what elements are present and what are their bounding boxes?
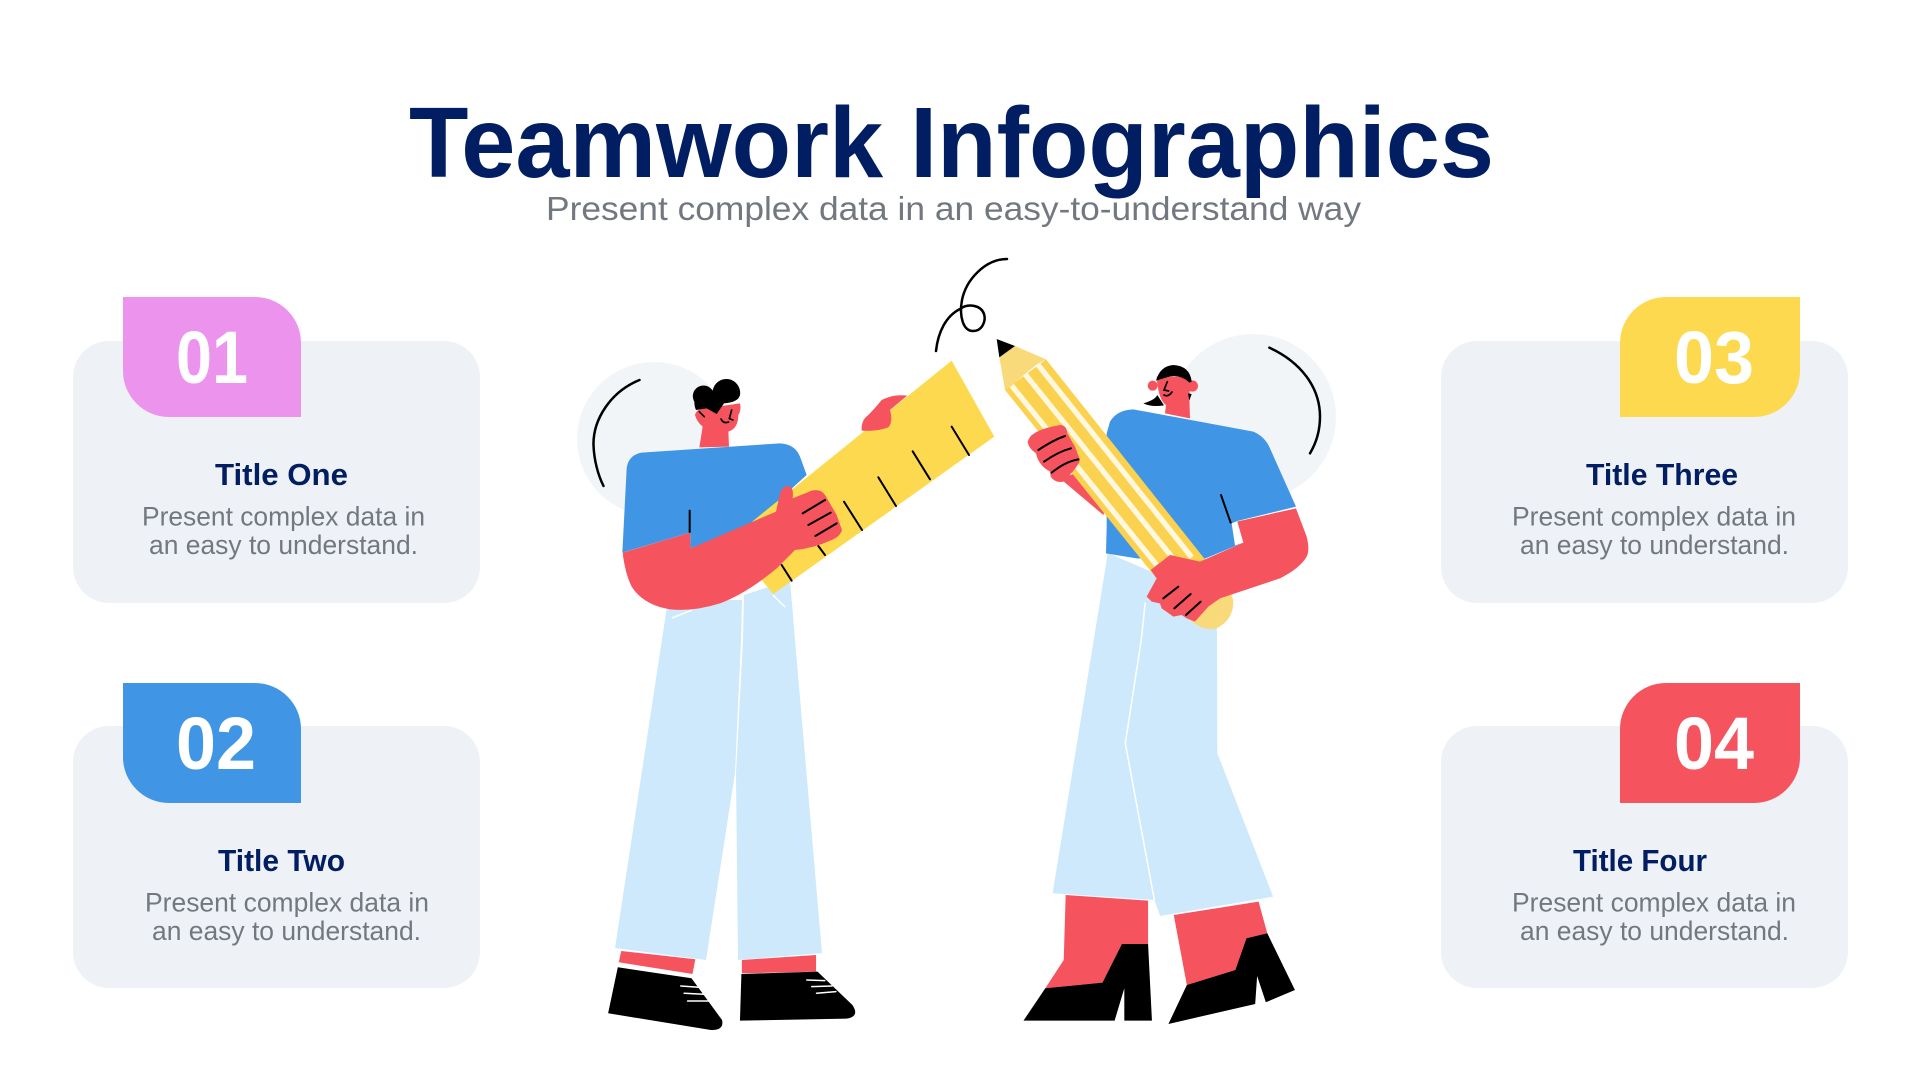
number badge 02 xyxy=(123,683,301,803)
card background xyxy=(1441,726,1848,988)
neck and head xyxy=(695,403,741,447)
heading: Title One: Title One xyxy=(215,457,348,492)
forearm behind pencil xyxy=(1060,473,1107,515)
neck and face xyxy=(1157,377,1191,418)
face details xyxy=(699,410,733,423)
card background xyxy=(1441,341,1848,603)
man legs and shoes xyxy=(608,951,855,1030)
card background xyxy=(73,726,480,988)
man trouser pockets xyxy=(672,595,785,618)
description 3: an easy to understand. xyxy=(1520,530,1789,560)
number 03: 03 xyxy=(1674,316,1754,399)
pencil end xyxy=(1190,583,1233,629)
arm and lower hand xyxy=(1147,508,1308,622)
number badge 04 xyxy=(1620,683,1800,803)
description 4: an easy to understand. xyxy=(1520,916,1789,946)
man trousers xyxy=(615,580,822,960)
arc left xyxy=(593,380,640,486)
arc right xyxy=(1269,348,1320,453)
heading: Title Three: Title Three xyxy=(1586,457,1738,492)
description 1: an easy to understand. xyxy=(149,530,418,560)
number badge 03 xyxy=(1620,297,1800,417)
illustration: woman with pencil xyxy=(997,334,1336,1024)
number 04: 04 xyxy=(1674,702,1754,785)
woman upper body xyxy=(997,339,1320,629)
man upper body xyxy=(622,361,994,610)
woman lower body xyxy=(1024,553,1295,1024)
armpit gap xyxy=(1232,522,1243,545)
description 2: an easy to understand. xyxy=(152,916,421,946)
upper hand xyxy=(1028,425,1080,482)
subtitle: Present complex data in an easy-to-understand way xyxy=(546,190,1362,227)
illustration: man with ruler xyxy=(577,361,994,1030)
face lines xyxy=(1164,382,1172,396)
panel: card 02 xyxy=(73,683,480,988)
pencil wood tip xyxy=(999,346,1046,390)
shoes xyxy=(608,967,855,1030)
panel: card 04 xyxy=(1441,683,1848,988)
shirt crease xyxy=(687,511,693,532)
heading: Title Two: Title Two xyxy=(218,843,345,878)
panel: card 01 xyxy=(73,297,480,603)
panel: card 03 xyxy=(1441,297,1848,603)
shoe laces xyxy=(681,980,836,1001)
ears xyxy=(1148,380,1198,392)
description 3: Present complex data in xyxy=(1512,502,1796,532)
high heel boots xyxy=(1024,933,1295,1024)
description 1: Present complex data in xyxy=(142,502,425,532)
shirt crease xyxy=(1221,495,1231,523)
hair xyxy=(1143,365,1192,406)
trouser seam xyxy=(1125,603,1154,900)
skin legs xyxy=(1045,895,1267,988)
upper hand finger lines xyxy=(1038,436,1078,473)
finger lines xyxy=(803,500,837,536)
shirt xyxy=(622,443,807,553)
background circle right xyxy=(1170,334,1336,500)
front arm and hand xyxy=(623,486,842,610)
trousers xyxy=(1053,553,1273,916)
title: Teamwork Infographics xyxy=(409,87,1494,199)
icon: scribble line xyxy=(936,259,1007,351)
number 02: 02 xyxy=(176,702,256,785)
hair xyxy=(693,379,740,414)
pencil lead xyxy=(997,339,1015,357)
number badge 01 xyxy=(123,297,301,417)
ruler xyxy=(750,361,994,594)
socks xyxy=(619,951,816,974)
card background xyxy=(73,341,480,603)
shirt xyxy=(1106,409,1296,560)
pencil body xyxy=(1005,359,1227,620)
lower hand finger lines xyxy=(1163,587,1201,615)
pencil stripes xyxy=(1012,364,1192,565)
description 2: Present complex data in xyxy=(145,888,429,918)
ruler ticks xyxy=(782,427,969,581)
background circle left xyxy=(577,362,731,516)
number 01: 01 xyxy=(176,316,248,399)
description 4: Present complex data in xyxy=(1512,888,1796,918)
heading: Title Four: Title Four xyxy=(1573,843,1707,878)
back hand xyxy=(862,395,907,431)
